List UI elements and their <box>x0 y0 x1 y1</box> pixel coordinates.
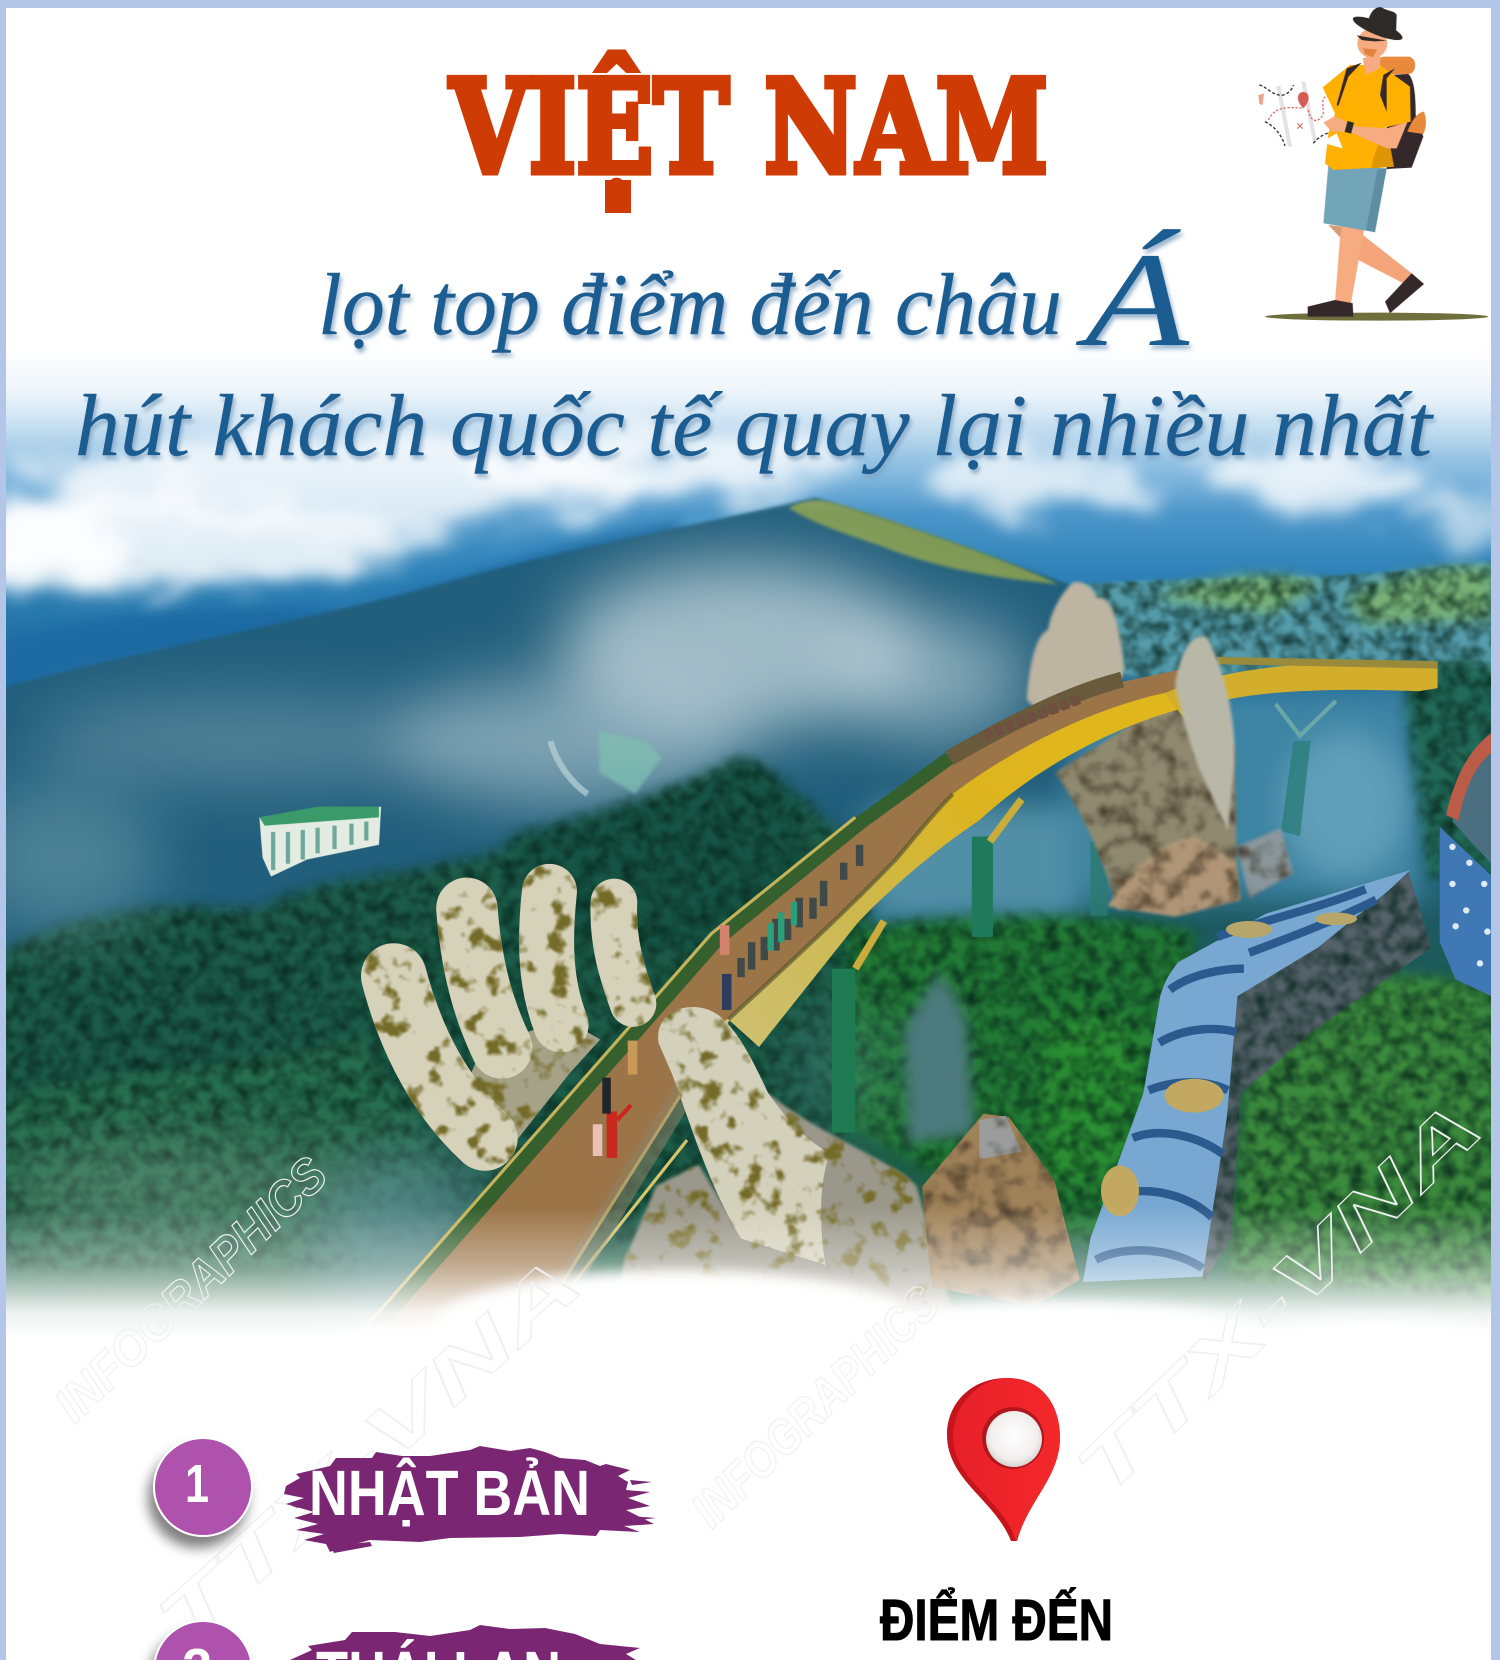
front leg <box>1335 225 1364 305</box>
subtitle in script style: lọt top điểm đến châu <box>318 257 1062 354</box>
clouds behind the mountain <box>0 432 1500 601</box>
watermarks: INFOGRAPHICS <box>44 1146 338 1433</box>
bottle <box>1407 112 1426 134</box>
hat <box>1350 7 1405 44</box>
glasses and beard <box>1357 35 1387 41</box>
brown rock at base of near hand <box>922 1114 1080 1306</box>
mosaic walkway <box>1083 870 1410 1282</box>
watch <box>1345 121 1354 134</box>
ranking item 1 <box>153 1437 656 1553</box>
far hand fingers <box>1027 582 1124 730</box>
icon: red location pin <box>947 1378 1060 1541</box>
pale building <box>599 730 662 794</box>
white cloud at base of the photo <box>275 1270 1500 1389</box>
thumb of far hand in front of bridge <box>1175 636 1235 831</box>
subtitle in script style: hút khách quốc tế quay lại nhiều nhất <box>75 378 1435 475</box>
number badge 2 <box>153 1620 253 1660</box>
watermarks <box>44 1086 1497 1660</box>
straps <box>1337 63 1395 112</box>
shirt <box>1323 65 1411 170</box>
green building left <box>259 807 381 877</box>
number badge 1: 1 <box>185 1454 209 1514</box>
title: VIỆT NAM: VIỆT NAM <box>449 53 1048 203</box>
far yellow span <box>1164 662 1438 720</box>
map <box>1260 85 1342 147</box>
mist over lower forest <box>0 783 900 1302</box>
left railing <box>373 758 950 1332</box>
back shoe <box>1385 273 1424 313</box>
icon: traveller with map <box>1258 7 1488 321</box>
mist over the mountain <box>32 561 1027 805</box>
hazy column rock <box>905 972 974 1143</box>
watermarks: TTX-VNA <box>142 1241 597 1660</box>
bottom fade <box>0 1207 1500 1339</box>
tourists on bridge <box>593 699 1080 1158</box>
purple brush stroke <box>284 1446 656 1553</box>
misty zone behind bridge right <box>1069 688 1429 900</box>
observation building at right edge <box>1440 728 1500 1000</box>
shorts <box>1323 165 1387 232</box>
backpack <box>1387 74 1423 169</box>
distant blue hills <box>7 515 686 684</box>
arm <box>1323 116 1408 148</box>
photo: Golden Bridge at Ba Na Hills <box>0 344 1500 1389</box>
mountain <box>6 496 1070 955</box>
near hand: four fingers <box>394 891 633 1170</box>
top fade <box>0 344 1500 513</box>
ranking item 2 <box>153 1620 640 1660</box>
far hand palm and rocks <box>1055 699 1294 917</box>
number badge 1 <box>153 1437 253 1537</box>
watermarks: TTX-VNA <box>1061 1086 1497 1512</box>
map corner <box>1325 133 1343 148</box>
bridge <box>365 661 1438 1332</box>
near hand: thumb, palm <box>614 1007 953 1313</box>
far right ridge <box>1084 556 1491 679</box>
neck and head <box>1363 53 1381 75</box>
front shoe <box>1308 300 1353 317</box>
bedroll <box>1377 57 1415 74</box>
label: ĐIỂM ĐẾN: ĐIỂM ĐẾN <box>880 1588 1113 1653</box>
support pillars <box>832 701 1336 1133</box>
country name 1: NHẬT BẢN <box>309 1456 590 1529</box>
lower lattice railing <box>728 690 1228 1047</box>
bridge deck <box>373 662 1217 1332</box>
forest <box>0 663 1500 1302</box>
ground shadow <box>1265 313 1488 321</box>
subtitle in script style <box>75 226 1435 475</box>
watermarks: INFOGRAPHICS <box>681 1275 950 1538</box>
right rock wall <box>1202 870 1431 1286</box>
purple brush stroke <box>290 1625 640 1660</box>
subtitle in script style: Á <box>1075 226 1190 375</box>
back leg <box>1352 233 1412 283</box>
